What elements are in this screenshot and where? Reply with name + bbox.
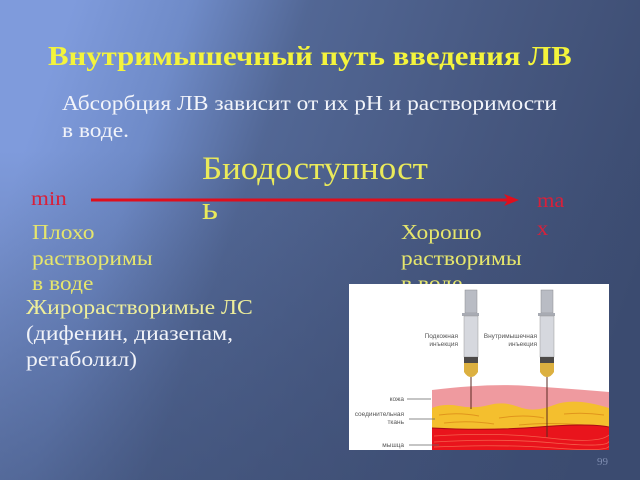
label leader lines bbox=[407, 399, 439, 445]
text: fat soluble drugs: (дифенин, диазепам, bbox=[26, 321, 233, 345]
label: max: ma bbox=[537, 190, 564, 212]
text: poorly soluble: растворимы bbox=[32, 246, 153, 270]
text: well soluble bbox=[401, 220, 522, 295]
text: poorly soluble bbox=[32, 220, 153, 295]
intro text bbox=[62, 91, 557, 142]
text: well soluble: растворимы bbox=[401, 246, 522, 270]
title: Внутримышечный путь введения ЛВ bbox=[48, 41, 572, 71]
syringe: subcutaneous bbox=[462, 290, 479, 409]
diagram labels bbox=[355, 333, 537, 449]
tissue: connective layer bbox=[432, 402, 609, 434]
text: poorly soluble: Плохо bbox=[32, 220, 95, 244]
text: fat soluble drugs: ретаболил) bbox=[26, 347, 137, 371]
page number: 99 bbox=[597, 456, 608, 468]
syringe: intramuscular bbox=[538, 290, 555, 437]
tissue: muscle layer bbox=[432, 425, 609, 450]
diagram labels: Подкожная bbox=[425, 333, 458, 340]
label: max bbox=[537, 190, 564, 240]
text: fat soluble drugs: Жирорастворимые ЛС bbox=[26, 295, 253, 319]
heading: bioavailability bbox=[202, 151, 428, 227]
text: fat soluble drugs bbox=[26, 295, 253, 371]
diagram labels: соединительная bbox=[355, 411, 404, 418]
tissue: skin layer bbox=[432, 385, 609, 414]
arrow: min to max bbox=[91, 194, 519, 206]
label: min: min bbox=[31, 188, 67, 210]
illustration: injection diagram bbox=[349, 284, 609, 450]
text: well soluble: в воде bbox=[401, 271, 462, 295]
intro text: Абсорбция ЛВ зависит от их рН и растворимости bbox=[62, 91, 557, 115]
diagram labels: кожа bbox=[390, 396, 404, 403]
diagram labels: мышца bbox=[382, 442, 404, 449]
label: max: x bbox=[537, 218, 548, 240]
diagram labels: Внутримышечная bbox=[484, 333, 537, 340]
text: well soluble: Хорошо bbox=[401, 220, 482, 244]
diagram labels: инъекция bbox=[429, 341, 458, 348]
diagram labels: инъекция bbox=[508, 341, 537, 348]
heading: bioavailability: Биодоступност bbox=[202, 151, 428, 187]
diagram labels: ткань bbox=[387, 419, 405, 426]
intro text: в воде. bbox=[62, 118, 129, 142]
text: poorly soluble: в воде bbox=[32, 271, 93, 295]
heading: bioavailability: ь bbox=[202, 191, 218, 227]
